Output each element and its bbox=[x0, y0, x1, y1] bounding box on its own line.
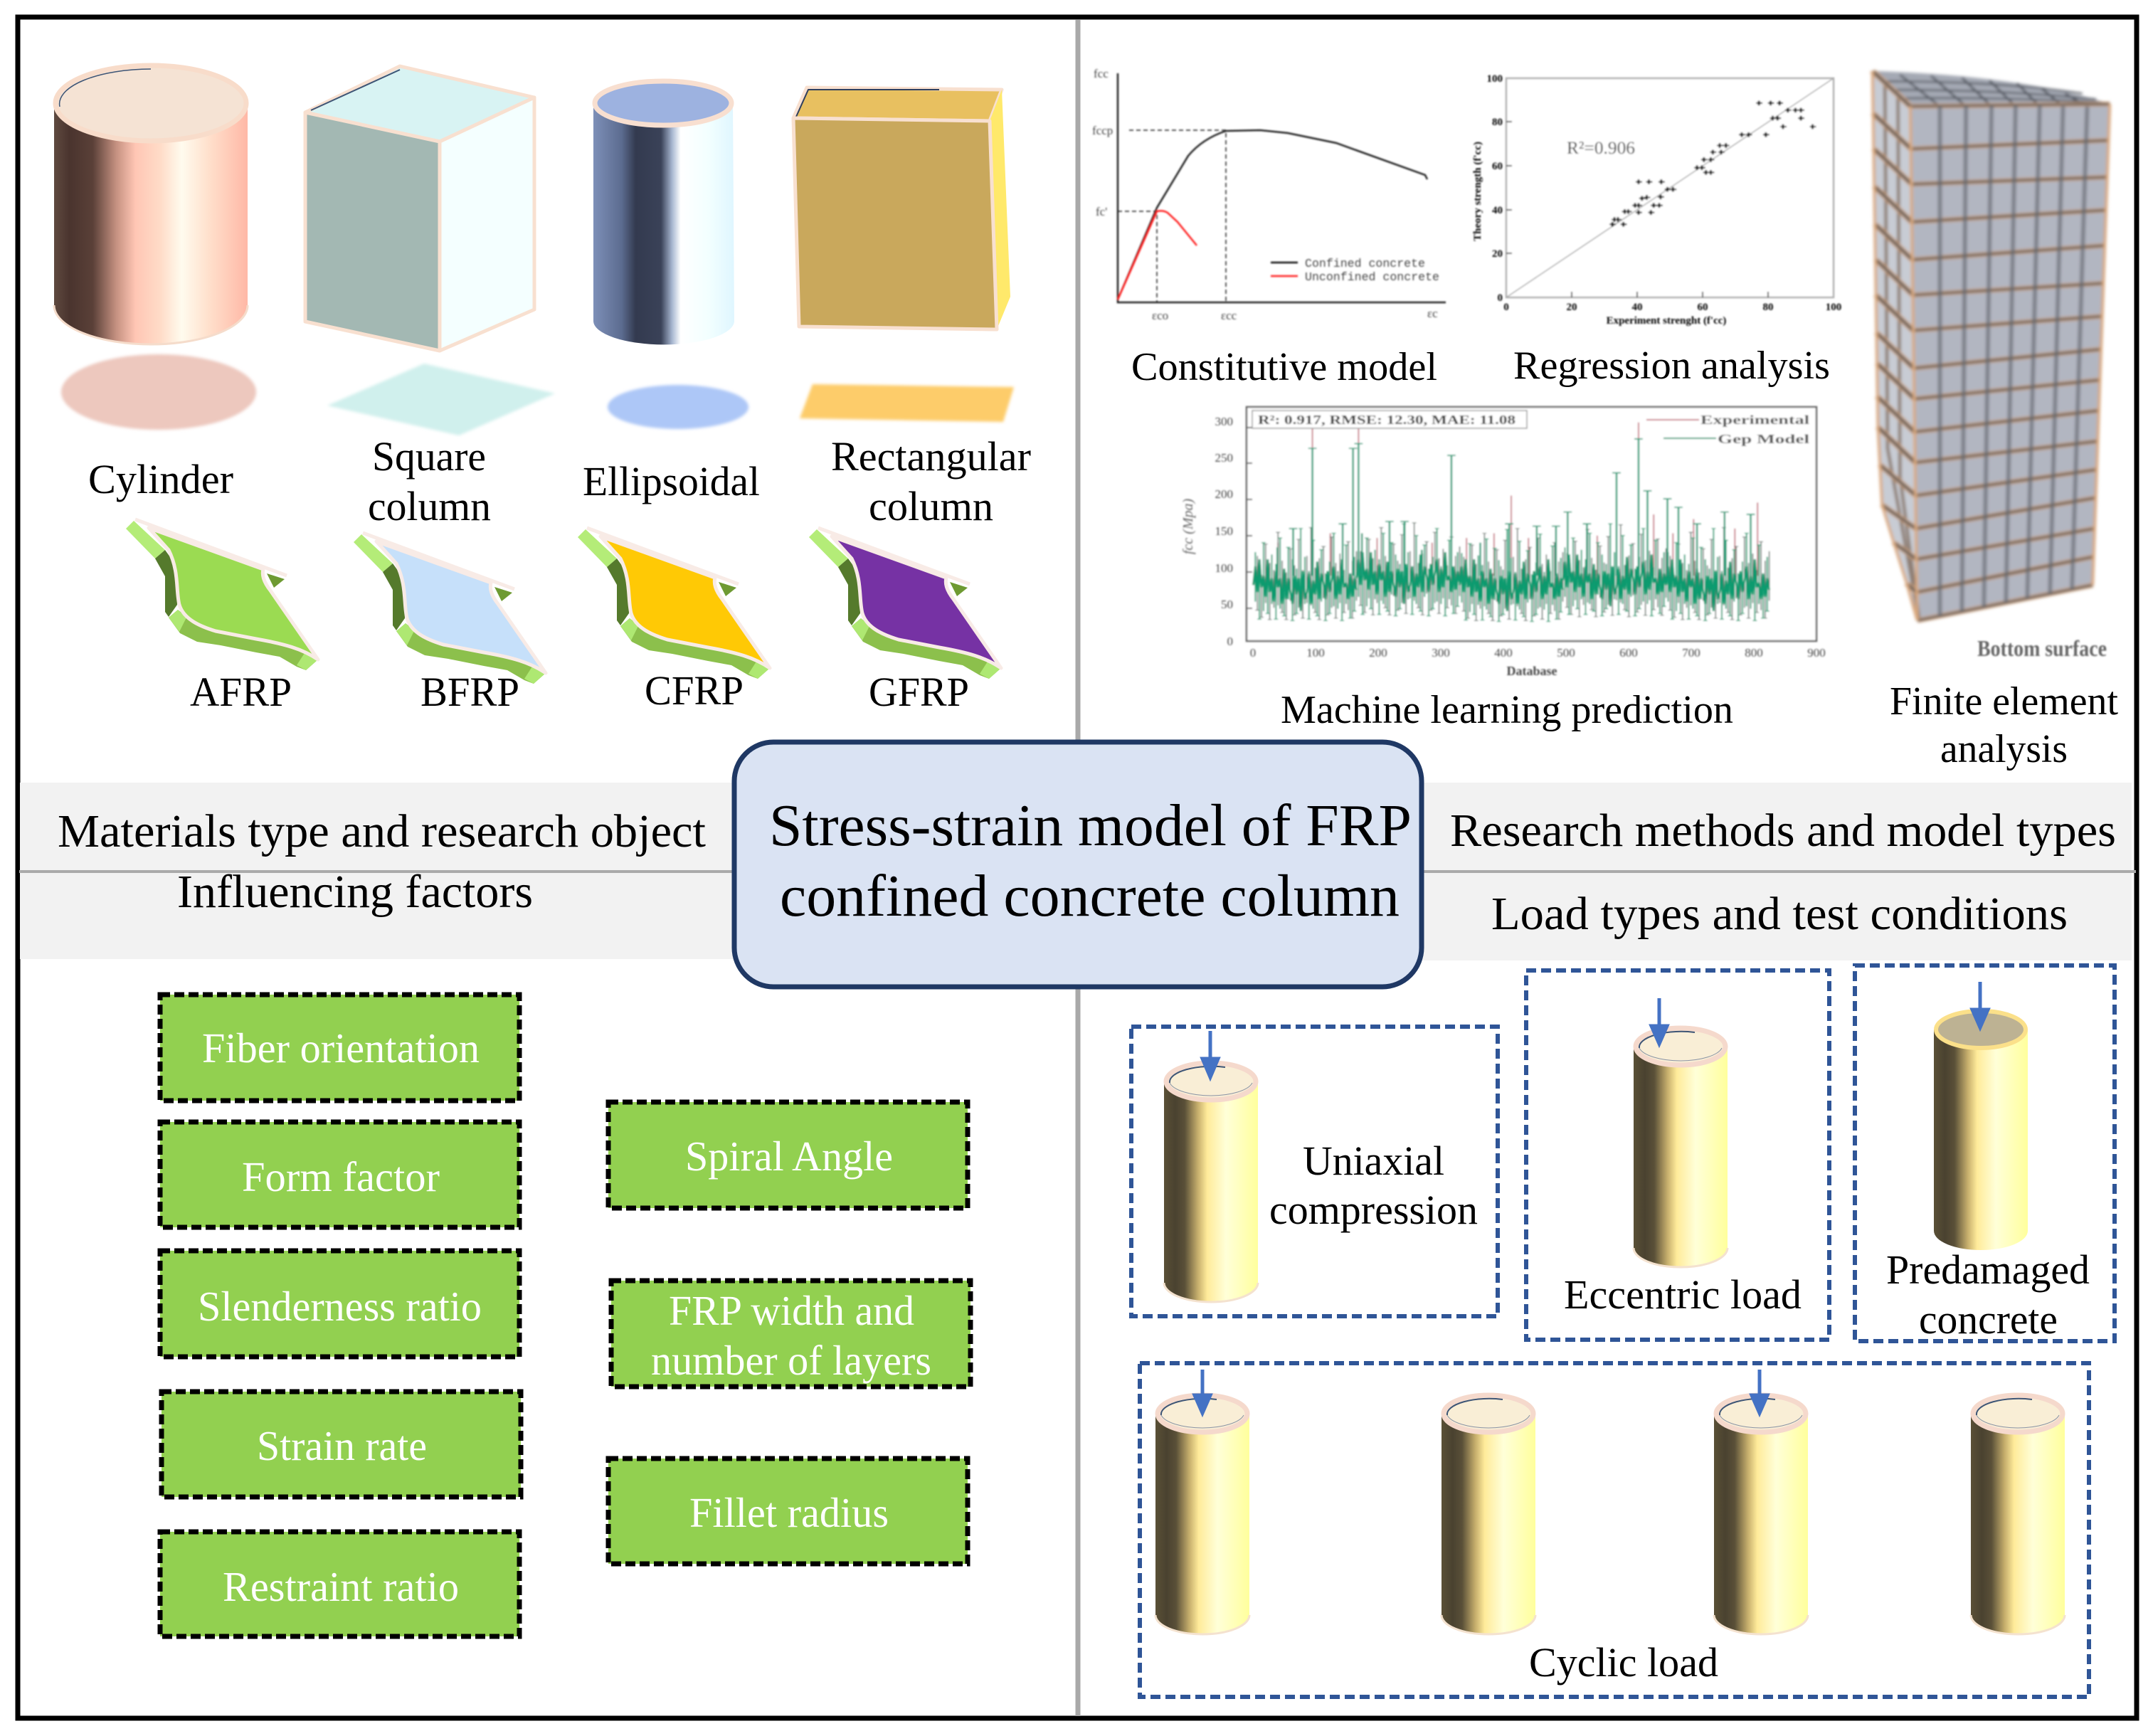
label: compression bbox=[1269, 1187, 1478, 1233]
chart: machine learning prediction: 50 bbox=[1221, 598, 1233, 611]
icon: AFRP sheet bbox=[126, 519, 318, 670]
title box: confined concrete column bbox=[780, 863, 1400, 929]
label: rectangular column bbox=[831, 433, 1031, 529]
factor: FRP width and number of layers: number of layers bbox=[651, 1337, 931, 1384]
chart: machine learning prediction: 600 bbox=[1619, 646, 1638, 660]
factor: fiber orientation bbox=[160, 995, 519, 1101]
icon: GFRP sheet bbox=[809, 528, 1001, 679]
label: square column bbox=[368, 433, 491, 529]
chart: machine learning prediction: 200 bbox=[1369, 646, 1387, 660]
chart: machine learning prediction: 500 bbox=[1557, 646, 1575, 660]
chart: regression analysis: 100 bbox=[1826, 302, 1841, 313]
chart: constitutive model: fcc bbox=[1094, 67, 1109, 80]
icon: cylinder column bbox=[54, 65, 248, 344]
label: Predamaged bbox=[1886, 1247, 2090, 1293]
label: ellipsoidal: Ellipsoidal bbox=[583, 458, 760, 504]
label bbox=[1886, 1247, 2090, 1343]
chart: regression analysis: 60 bbox=[1698, 302, 1708, 313]
label: Eccentric load bbox=[1564, 1271, 1802, 1318]
label: concrete bbox=[1919, 1296, 2058, 1343]
group: uniaxial compression bbox=[1131, 1027, 1498, 1316]
factor: restraint ratio bbox=[160, 1532, 519, 1636]
chart: machine learning prediction: 250 bbox=[1215, 451, 1233, 465]
label: AFRP: AFRP bbox=[190, 669, 292, 715]
label: finite element analysis: analysis bbox=[1940, 727, 2068, 771]
chart: constitutive model: Unconfined concrete bbox=[1305, 271, 1439, 285]
chart: machine learning prediction: 0 bbox=[1250, 646, 1256, 660]
arrow 2 bbox=[1752, 1370, 1767, 1413]
chart: regression analysis: 60 bbox=[1492, 161, 1503, 172]
panel: load types and test conditions bbox=[1131, 965, 2115, 1697]
chart: machine learning prediction: 150 bbox=[1215, 524, 1233, 538]
factor: fillet radius bbox=[608, 1459, 968, 1564]
icon: circular section bbox=[61, 354, 256, 430]
factor: fillet radius: Fillet radius bbox=[689, 1489, 889, 1536]
chart: regression analysis: 40 bbox=[1492, 205, 1503, 216]
arrow 1 bbox=[1195, 1370, 1210, 1413]
icon: BFRP sheet bbox=[354, 533, 546, 684]
factor: spiral angle: Spiral Angle bbox=[685, 1133, 893, 1180]
chart: constitutive model: fccp bbox=[1092, 124, 1113, 137]
icon: column 4 bbox=[1971, 1395, 2065, 1634]
icon: column bbox=[1164, 1063, 1258, 1302]
chart: regression analysis: 20 bbox=[1492, 248, 1503, 260]
chart: constitutive model: εco bbox=[1152, 309, 1168, 322]
chart: machine learning prediction: Gep Model bbox=[1718, 432, 1809, 446]
icon: CFRP sheet bbox=[578, 528, 770, 679]
icon: square section bbox=[327, 364, 555, 435]
label: constitutive model: Constitutive model bbox=[1131, 345, 1437, 389]
factor: spiral angle bbox=[608, 1102, 968, 1208]
chart: regression analysis: 20 bbox=[1567, 302, 1577, 313]
chart: machine learning prediction: 900 bbox=[1807, 646, 1826, 660]
chart: machine learning prediction: 800 bbox=[1745, 646, 1763, 660]
title box bbox=[734, 742, 1422, 987]
icon: rectangular column bbox=[793, 88, 1010, 329]
factor: form factor bbox=[160, 1122, 519, 1227]
chart: constitutive model: Confined concrete bbox=[1305, 258, 1425, 271]
icon: square column bbox=[305, 66, 534, 351]
heading: research methods and model types: Research methods and model types bbox=[1450, 805, 2116, 857]
label: BFRP: BFRP bbox=[420, 669, 519, 715]
factor: FRP width and number of layers: FRP width and bbox=[669, 1287, 914, 1334]
chart: machine learning prediction: Experimental bbox=[1700, 413, 1809, 427]
chart: machine learning prediction: 300 bbox=[1432, 646, 1450, 660]
label: finite element analysis bbox=[1890, 679, 2118, 771]
band: section headings left bbox=[20, 783, 734, 959]
heading: load types and test conditions: Load types and test conditions bbox=[1491, 888, 2068, 940]
label: Uniaxial bbox=[1303, 1138, 1444, 1184]
chart: constitutive model: fc' bbox=[1096, 205, 1107, 218]
factor: FRP width and number of layers bbox=[611, 1281, 970, 1387]
chart: regression analysis: 80 bbox=[1763, 302, 1773, 313]
title box: Stress-strain model of FRP bbox=[769, 793, 1412, 859]
label: CFRP: CFRP bbox=[645, 667, 744, 714]
icon: ellipsoidal column bbox=[593, 81, 734, 344]
chart: machine learning prediction: 100 bbox=[1215, 561, 1233, 575]
icon: column bbox=[1634, 1028, 1728, 1267]
arrow bbox=[1651, 998, 1667, 1044]
label: square column: Square bbox=[372, 433, 486, 480]
chart: machine learning prediction: Database bbox=[1507, 664, 1557, 678]
label bbox=[1269, 1138, 1478, 1233]
factor: form factor: Form factor bbox=[242, 1153, 440, 1200]
chart: regression analysis: 40 bbox=[1632, 302, 1642, 313]
chart: machine learning prediction: R²: 0.917, RMSE: 12.30, MAE: 11.08 bbox=[1258, 413, 1515, 427]
chart: constitutive model: εc bbox=[1427, 307, 1438, 320]
chart: machine learning prediction: 100 bbox=[1306, 646, 1325, 660]
factor: fiber orientation: Fiber orientation bbox=[202, 1025, 480, 1071]
chart: regression analysis: Experiment strenght (f'cc) bbox=[1607, 315, 1726, 327]
band: section headings right bbox=[1423, 783, 2132, 960]
icon: ellipsoidal section bbox=[608, 385, 748, 429]
group: cyclic load bbox=[1140, 1363, 2089, 1697]
chart: machine learning prediction: 200 bbox=[1215, 487, 1233, 501]
arrow bbox=[1202, 1031, 1218, 1077]
label: Cyclic load bbox=[1529, 1639, 1718, 1685]
panel: influencing factors bbox=[160, 995, 970, 1636]
factor: slenderness ratio bbox=[160, 1251, 519, 1357]
chart: regression analysis: 0 bbox=[1497, 292, 1503, 304]
heading: materials type and research object: Materials type and research object bbox=[58, 805, 706, 857]
label: bottom surface: Bottom surface bbox=[1977, 635, 2107, 661]
figure: finite element mesh bbox=[1873, 71, 2110, 620]
chart: machine learning prediction: 300 bbox=[1215, 415, 1233, 428]
icon: column 3 bbox=[1714, 1395, 1808, 1634]
chart: machine learning prediction bbox=[1180, 407, 1826, 678]
chart: regression analysis: 0 bbox=[1503, 302, 1509, 313]
chart: regression analysis: 80 bbox=[1492, 117, 1503, 128]
label: regression analysis: Regression analysis bbox=[1513, 344, 1830, 388]
group: predamaged concrete bbox=[1855, 965, 2115, 1343]
panel: materials type and research object bbox=[54, 65, 1031, 715]
icon: rectangular section bbox=[800, 384, 1014, 422]
chart: machine learning prediction: 400 bbox=[1494, 646, 1513, 660]
chart: machine learning prediction: 0 bbox=[1227, 635, 1233, 648]
chart: regression analysis: R²=0.906 bbox=[1567, 139, 1635, 158]
icon: column bbox=[1934, 1011, 2028, 1250]
factor: slenderness ratio: Slenderness ratio bbox=[198, 1283, 482, 1330]
chart: regression analysis bbox=[1472, 73, 1841, 327]
label: rectangular column: Rectangular bbox=[831, 433, 1031, 480]
chart: constitutive model bbox=[1092, 67, 1446, 322]
chart: constitutive model: εcc bbox=[1221, 309, 1237, 322]
chart: regression analysis: 100 bbox=[1487, 73, 1503, 85]
factor: strain rate: Strain rate bbox=[257, 1422, 427, 1469]
factor: restraint ratio: Restraint ratio bbox=[223, 1563, 459, 1610]
icon: column 1 bbox=[1155, 1395, 1249, 1634]
label: finite element analysis: Finite element bbox=[1890, 679, 2118, 724]
label: GFRP: GFRP bbox=[869, 669, 969, 715]
icon: column 2 bbox=[1441, 1395, 1535, 1634]
label: rectangular column: column bbox=[869, 483, 993, 529]
panel: research methods and model types bbox=[1092, 67, 2118, 771]
label: square column: column bbox=[368, 483, 491, 529]
chart: machine learning prediction: 700 bbox=[1682, 646, 1700, 660]
arrow bbox=[1972, 982, 1988, 1027]
label: cylinder: Cylinder bbox=[88, 456, 233, 502]
factor: strain rate bbox=[162, 1392, 521, 1497]
group: eccentric load bbox=[1526, 970, 1829, 1340]
chart: machine learning prediction: fcc (Mpa) bbox=[1180, 499, 1196, 554]
chart: regression analysis: Theory strength (f'cc) bbox=[1472, 142, 1483, 241]
heading: influencing factors: Influencing factors bbox=[177, 866, 533, 918]
label: machine learning prediction: Machine learning prediction bbox=[1281, 688, 1733, 732]
